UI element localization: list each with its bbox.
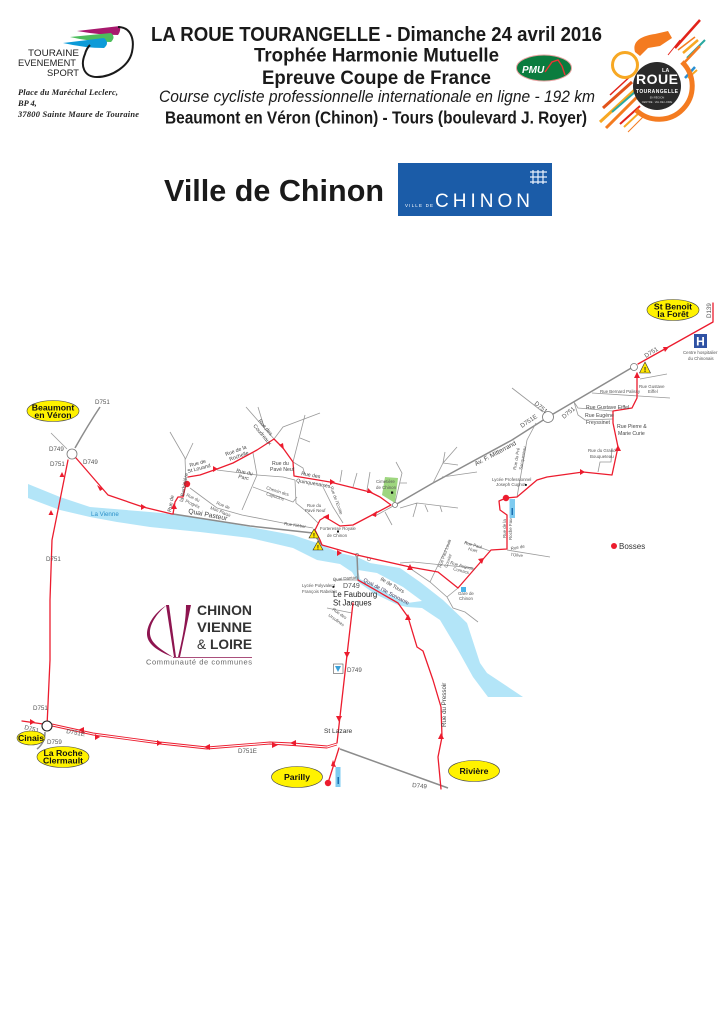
- logo: Ville de Chinon: CHINON: [435, 191, 530, 212]
- road labels: [23, 303, 718, 791]
- road labels: Rue de l'Ecotte: [329, 486, 344, 516]
- road labels: Rue Auguste: [450, 560, 476, 572]
- organiser address: 37800 Sainte Maure de Touraine: [17, 110, 139, 119]
- road labels: Forteresse Royale: [320, 526, 356, 531]
- logo: Ville de Chinon: VILLE DE: [405, 203, 433, 208]
- road labels: St Lazare: [324, 728, 353, 735]
- logo: La Roue Tourangelle: LA: [662, 68, 669, 74]
- logo: Chinon Vienne & Loire: [146, 603, 252, 666]
- road labels: Rue du Pré: [512, 447, 521, 470]
- road labels: Rue Eugène: [585, 413, 614, 419]
- road labels: de Chinon: [376, 485, 397, 490]
- road labels: Marie Curie: [618, 431, 645, 437]
- logo: Touraine Evenement Sport: TOURAINE: [28, 48, 79, 58]
- heading: Ville de Chinon: Ville de Chinon: [164, 173, 384, 208]
- road labels: D751: [50, 461, 65, 468]
- road labels: Rue du: [236, 468, 253, 477]
- road labels: D751: [561, 405, 577, 421]
- icons: map symbols: H: [696, 334, 705, 348]
- title block: Beaumont en Véron (Chinon) - Tours (boulevard J. Royer): [165, 108, 587, 128]
- road labels: Pavé Neuf: [305, 508, 326, 513]
- road labels: Pavé Neuf: [270, 467, 295, 473]
- road labels: Rue du: [307, 503, 322, 508]
- road labels: François Rabelais: [302, 589, 338, 594]
- logo: Chinon Vienne & Loire: &: [197, 637, 206, 652]
- organiser address: [17, 88, 139, 119]
- road labels: Rue Pierre &: [617, 424, 647, 430]
- road labels: Quai Danton: [333, 575, 358, 582]
- road labels: Centre hospitalier: [683, 350, 718, 355]
- title block: [151, 24, 602, 128]
- road labels: D749: [343, 583, 360, 590]
- logo: Chinon Vienne & Loire: CHINON: [197, 603, 252, 618]
- road labels: Rue de la: [502, 519, 507, 538]
- logo: Chinon Vienne & Loire: LOIRE: [210, 637, 252, 652]
- road labels: Rue de la: [225, 445, 248, 458]
- place labels: [17, 300, 699, 788]
- road labels: D749: [412, 782, 428, 791]
- road labels: Comacs: [453, 566, 470, 575]
- road labels: D751E: [66, 728, 86, 738]
- road network: [37, 364, 670, 788]
- road labels: D751E: [519, 413, 539, 430]
- road labels: Chemin des: [266, 485, 290, 497]
- road labels: Eiffel: [648, 389, 658, 394]
- road labels: Huet: [468, 546, 479, 554]
- road labels: Rue des: [301, 471, 321, 480]
- place labels: La Roche: [43, 748, 83, 758]
- title block: Trophée Harmonie Mutuelle: [254, 46, 499, 66]
- logo: Chinon Vienne & Loire: Communauté de communes: [146, 658, 252, 666]
- road labels: Rue Paul: [464, 540, 483, 550]
- road labels: Chinon: [459, 596, 473, 601]
- icons: map symbols: !: [317, 544, 319, 552]
- logo: Touraine Evenement Sport: EVENEMENT: [18, 58, 77, 68]
- road labels: Ile de Tours: [379, 577, 405, 595]
- place labels: Beaumont: [32, 402, 74, 412]
- road labels: La Vienne: [91, 511, 119, 518]
- road labels: Quinquenaises: [296, 478, 331, 490]
- road labels: Av. F. Mitterrand: [474, 440, 518, 468]
- road labels: Bosses: [619, 542, 645, 551]
- road labels: Rue des: [256, 418, 274, 437]
- road labels: Joseph Cugnot: [496, 482, 526, 487]
- road labels: Courier: [443, 553, 453, 568]
- road labels: Roche Faucon: [508, 511, 513, 540]
- road labels: Ursulines: [327, 613, 346, 628]
- logo: PMU: PMU: [522, 65, 545, 76]
- road labels: Cimetière: [376, 479, 395, 484]
- title block: Epreuve Coupe de France: [262, 68, 491, 89]
- road labels: Quai Pasteur: [188, 508, 229, 523]
- park: Cimetière de Chinon: [382, 477, 398, 503]
- island: Ile de Tours: [358, 570, 422, 603]
- road labels: de Chinon: [327, 533, 348, 538]
- road labels: Rue de: [216, 500, 231, 510]
- road labels: Rue du Pressoir: [441, 683, 448, 727]
- road labels: Rue Gustave: [639, 384, 665, 389]
- road labels: D749: [49, 446, 64, 453]
- place labels: la Forêt: [657, 309, 689, 319]
- road labels: Rue du Grand: [588, 448, 616, 453]
- road labels: D749: [347, 667, 362, 674]
- logo: La Roue Tourangelle: TOURANGELLE: [636, 89, 679, 95]
- organiser address: BP 4,: [17, 99, 37, 108]
- road labels: du Chinonais: [688, 356, 714, 361]
- road labels: Parc: [238, 474, 250, 482]
- road labels: Le Faubourg: [333, 590, 377, 599]
- title block: Course cycliste professionnelle internationale en ligne - 192 km: [159, 87, 595, 106]
- road labels: Rue Bernard Palissy: [600, 389, 641, 394]
- road labels: Lycée Polyvalent: [302, 583, 336, 588]
- icons: map symbols: !: [644, 367, 646, 374]
- place labels: Parilly: [284, 772, 310, 782]
- race route: [22, 303, 713, 789]
- place labels: Clermault: [43, 756, 83, 766]
- route direction arrows: [30, 347, 669, 767]
- logo: La Roue Tourangelle: ROUE: [636, 71, 678, 87]
- road labels: Coudreaux: [251, 423, 273, 447]
- organiser address: Place du Maréchal Leclerc,: [18, 88, 118, 97]
- road labels: Rue du: [186, 492, 201, 503]
- place labels: Rivière: [460, 766, 489, 776]
- river: La Vienne: [28, 484, 523, 697]
- road labels: Rue Gustave Eiffel: [586, 405, 629, 411]
- logo: La Roue Tourangelle: CENTRE · VAL DE LOIRE: [642, 100, 672, 104]
- road labels: Rue de: [189, 459, 207, 469]
- road labels: D139: [706, 303, 713, 318]
- road labels: Rue de: [167, 495, 176, 512]
- road labels: Progrès: [185, 498, 201, 510]
- road labels: D751: [46, 556, 61, 563]
- place labels: St Benoît: [654, 302, 692, 312]
- road labels: Gare de: [458, 591, 474, 596]
- road labels: Bouqueteau: [590, 454, 614, 459]
- place labels: Cinais: [18, 733, 44, 743]
- road labels: Rue des: [331, 607, 348, 621]
- road labels: la Barbinière: [179, 473, 190, 502]
- road labels: D759: [47, 739, 62, 746]
- logo: La Roue Tourangelle: EN RÉGION: [650, 94, 664, 100]
- place labels: en Véron: [34, 410, 72, 420]
- road labels: D751: [95, 399, 110, 406]
- logo: Chinon Vienne & Loire: VIENNE: [197, 620, 252, 635]
- logo: La Roue Tourangelle: [600, 20, 705, 132]
- road labels: D751: [33, 705, 48, 712]
- road labels: Rue de: [510, 544, 526, 551]
- road labels: D751: [643, 346, 660, 360]
- road labels: Mon Plaisir: [210, 505, 232, 518]
- road labels: St Louand: [187, 463, 211, 475]
- title block: LA ROUE TOURANGELLE - Dimanche 24 avril 2016: [151, 24, 602, 46]
- road labels: Rue Paul Louis: [437, 538, 452, 568]
- road labels: l'Olive: [511, 552, 524, 558]
- logo: Touraine Evenement Sport: [18, 26, 133, 78]
- road labels: Sacquereau: [518, 445, 527, 470]
- icons: map symbols: [309, 334, 707, 787]
- road labels: D751: [533, 400, 549, 415]
- road labels: Lycée Professionnel: [492, 477, 531, 482]
- road labels: D751E: [238, 748, 257, 755]
- road labels: Freyssinet: [586, 420, 610, 426]
- road labels: D751: [23, 724, 40, 735]
- road labels: Quai de l'Ile Sonnante: [362, 577, 410, 607]
- road labels: Rochelle: [229, 450, 250, 463]
- road labels: Rue Kléber: [284, 521, 307, 529]
- road labels: Capucins: [266, 491, 285, 502]
- road labels: St Jacques: [333, 598, 372, 608]
- logo: PMU: [516, 55, 572, 81]
- icons: map symbols: !: [313, 532, 315, 540]
- road labels: D749: [83, 459, 98, 466]
- logo: Touraine Evenement Sport: SPORT: [47, 68, 80, 78]
- logo: Ville de Chinon: [398, 163, 552, 216]
- road labels: Rue du: [272, 461, 289, 467]
